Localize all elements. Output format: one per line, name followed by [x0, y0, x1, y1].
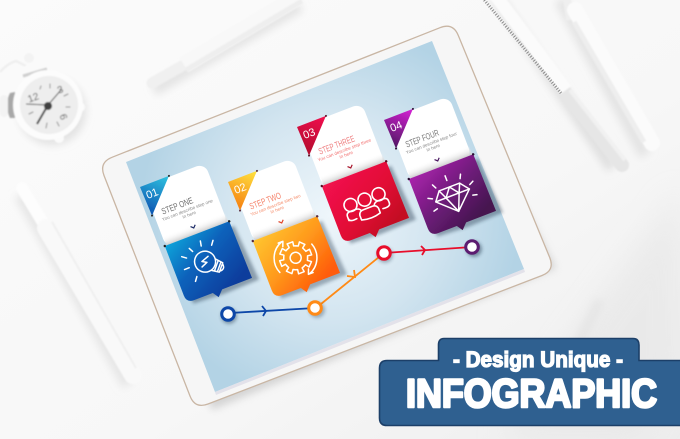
colour panel: [165, 221, 254, 309]
white card: [231, 158, 316, 243]
tablet: [103, 26, 556, 410]
chevron: [191, 225, 196, 229]
banner subtitle: - Design Unique -: [453, 347, 623, 372]
description: in here: [270, 205, 285, 215]
banner shape: [380, 338, 680, 426]
blue segment with arrow: [230, 306, 315, 316]
card: step one: [140, 158, 260, 309]
white card: [300, 103, 385, 188]
node: red: [377, 247, 393, 263]
clock: [0, 53, 86, 145]
screen: [126, 41, 524, 392]
icon: diamond: [423, 167, 481, 220]
number: 01: [144, 186, 160, 202]
node: orange: [309, 302, 325, 318]
heading: STEP TWO: [248, 190, 282, 211]
description: in here: [339, 150, 354, 160]
card: step two: [228, 153, 348, 304]
colour panel: [409, 154, 498, 242]
heading: STEP FOUR: [404, 127, 441, 149]
orange segment with arrow: [316, 253, 384, 308]
tablet body: [103, 26, 551, 405]
number ribbon: [384, 109, 424, 149]
number ribbon: [297, 116, 337, 156]
timeline: [221, 241, 482, 324]
node: purple: [466, 241, 482, 257]
number: 04: [388, 119, 404, 135]
colour panel: [322, 161, 411, 249]
card: step four: [384, 91, 504, 242]
description: You can describe step one: [161, 198, 214, 222]
heading: STEP ONE: [160, 195, 194, 216]
icon: light bulb: [177, 234, 233, 289]
clock numeral 9: 9: [58, 112, 71, 121]
white card: [387, 96, 472, 181]
pen: dotted grip: [490, 0, 625, 168]
chevron: [279, 220, 284, 224]
card: step three: [297, 98, 417, 249]
clock numeral 12: 12: [26, 91, 41, 105]
icon: group of people: [342, 186, 392, 226]
chevron: [348, 165, 353, 169]
heading: STEP THREE: [317, 134, 356, 156]
node: blue: [221, 308, 237, 324]
white card: [143, 163, 228, 248]
description: You can describe step two: [250, 193, 302, 217]
description: in here: [426, 143, 441, 153]
description: You can describe step three: [317, 137, 372, 163]
pen grip dots: [481, 0, 561, 93]
pen: top right: [560, 0, 652, 155]
pen: left: [20, 188, 136, 385]
number ribbon: [228, 171, 268, 211]
description: in here: [182, 210, 197, 220]
number: 03: [301, 126, 317, 142]
step cards: [140, 91, 504, 309]
banner: [380, 338, 680, 426]
red segment with arrow: [384, 246, 472, 255]
icon: gear with arrows: [268, 232, 323, 284]
clock numeral 3: 3: [56, 84, 65, 97]
banner title: INFOGRAPHIC: [406, 372, 657, 416]
number ribbon: [140, 176, 180, 216]
pen: top left: [152, 0, 302, 90]
number: 02: [232, 181, 248, 197]
description: You can describe step four: [405, 131, 458, 155]
colour panel: [253, 216, 342, 304]
chevron: [435, 158, 440, 162]
